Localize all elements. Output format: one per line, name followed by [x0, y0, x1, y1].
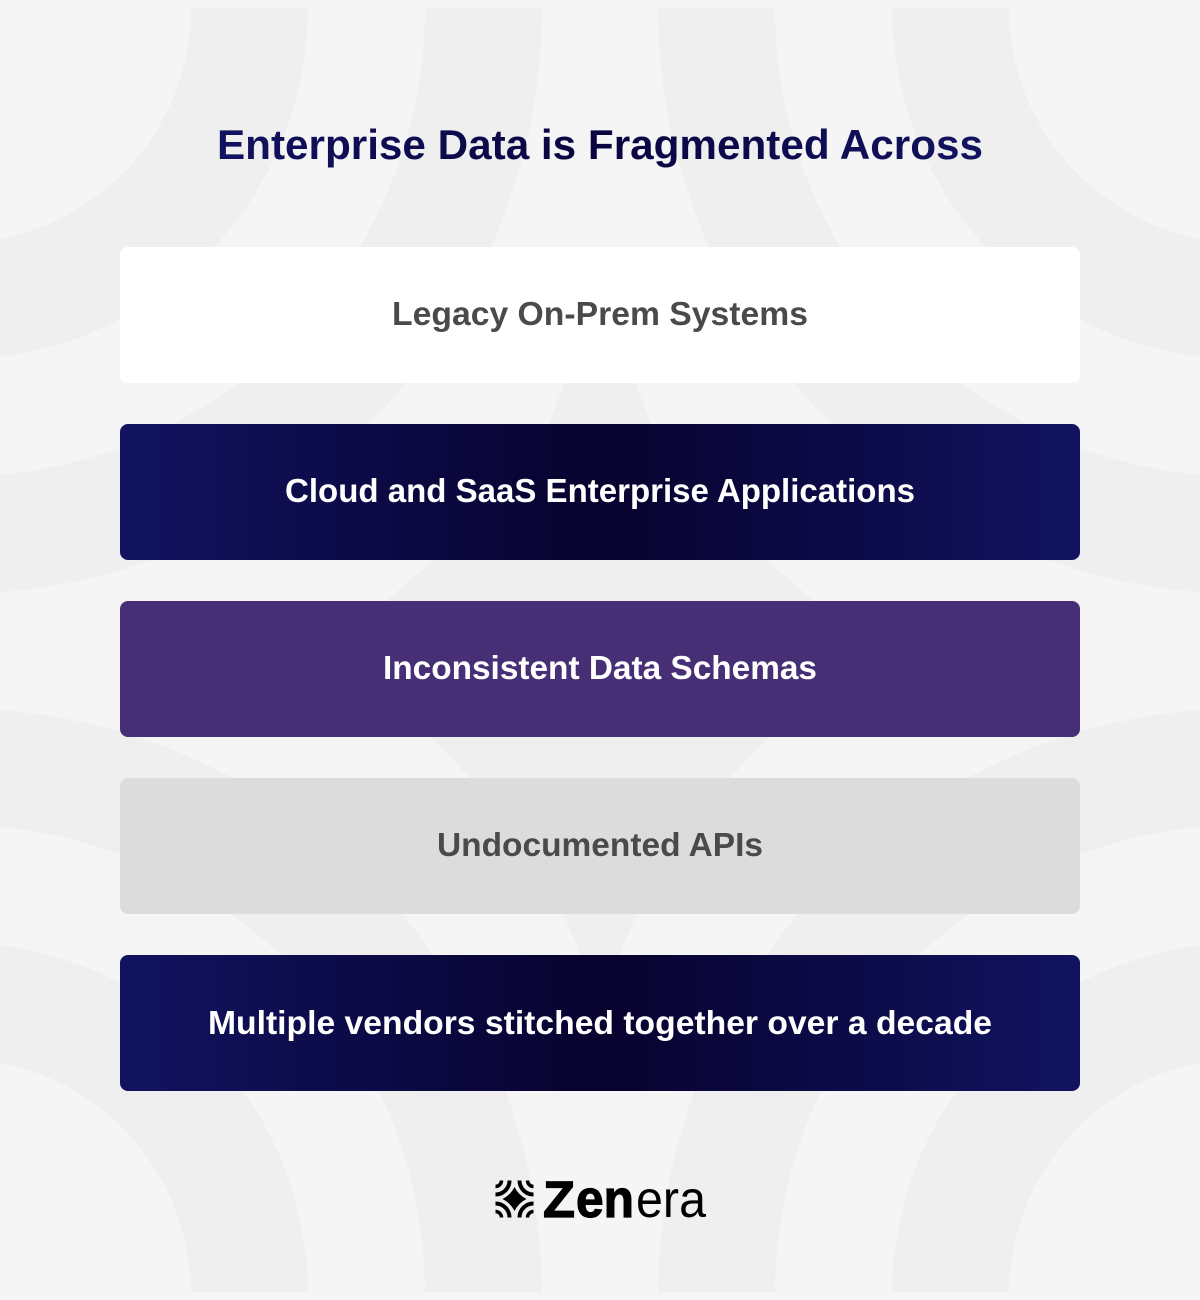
panel: undocumented apis — [120, 778, 1080, 914]
panel: legacy on-prem systems — [120, 247, 1080, 383]
label: legacy on-prem systems: Legacy On-Prem Systems — [392, 295, 808, 332]
label: multiple vendors: Multiple vendors stitched together over a decade — [208, 1004, 992, 1041]
wordmark: era — [636, 1171, 706, 1229]
label: undocumented apis: Undocumented APIs — [437, 826, 763, 863]
panel: multiple vendors — [120, 955, 1080, 1091]
wordmark: en — [576, 1170, 634, 1229]
panel: cloud and saas — [120, 424, 1080, 560]
label: cloud and saas: Cloud and SaaS Enterprise Applications — [285, 472, 915, 509]
label: inconsistent data schemas: Inconsistent Data Schemas — [383, 649, 817, 686]
icon: zenera star mark — [496, 1180, 534, 1218]
logo: zenera — [496, 1170, 706, 1229]
title: Enterprise Data is Fragmented Across — [217, 121, 983, 168]
wordmark: Z — [543, 1171, 575, 1228]
panel: inconsistent data schemas — [120, 601, 1080, 737]
